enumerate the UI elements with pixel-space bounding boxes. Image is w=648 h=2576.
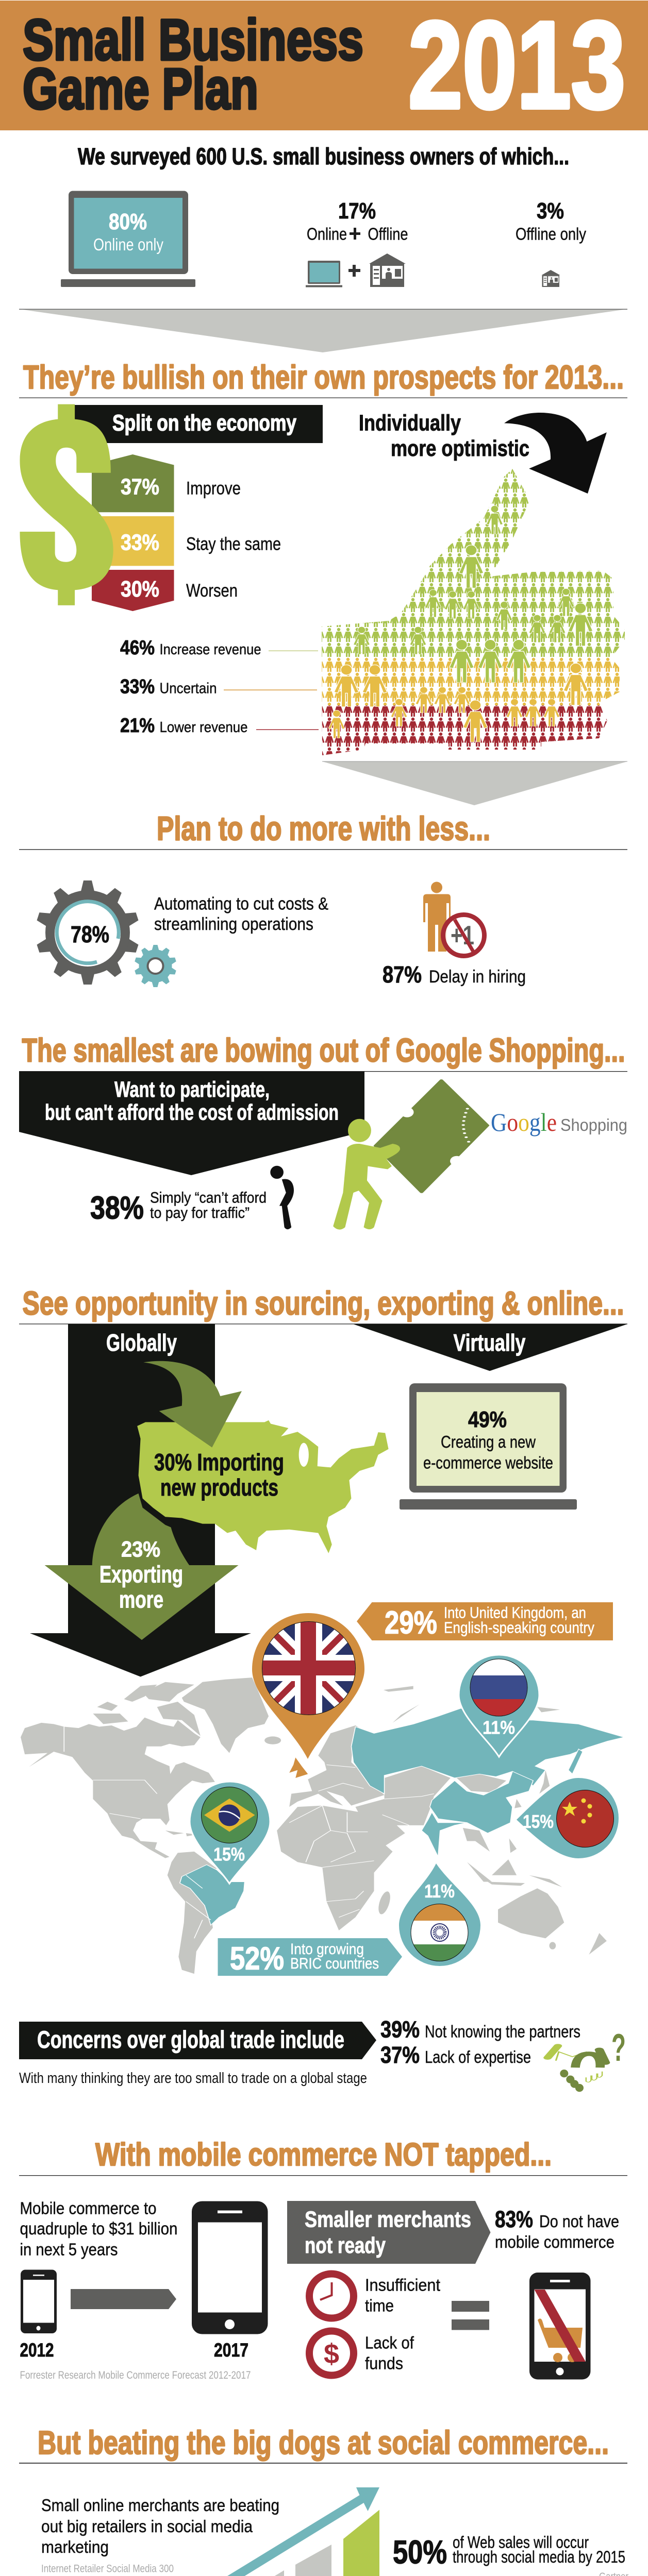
legend: lower revenue	[120, 715, 319, 737]
text: bric: Into growing	[290, 1941, 364, 1958]
stat: 83%: 83%	[495, 2206, 533, 2232]
icon: plus	[348, 265, 360, 277]
stat: importing	[154, 1449, 284, 1501]
label: online + offline: Online	[307, 225, 347, 243]
text: small merchants	[41, 2496, 279, 2556]
arrow: curved	[504, 413, 607, 494]
text: bric	[290, 1941, 379, 1972]
stat: exporting	[99, 1537, 183, 1613]
panel: google shopping	[19, 1072, 627, 1230]
panel: automating	[36, 880, 328, 987]
flag: united kingdom	[260, 1620, 358, 1718]
panel: online only	[61, 191, 195, 287]
panel: globally	[30, 1324, 389, 1676]
stat: 3%: 3%	[537, 198, 564, 224]
stat: 30% worsen: 30%	[121, 577, 159, 602]
panel: virtually	[353, 1324, 627, 1510]
icon: small store	[541, 270, 560, 287]
legend: uncertain: Uncertain	[160, 680, 217, 697]
pin: united kingdom	[252, 1613, 364, 1759]
stat: exporting: Exporting	[99, 1561, 183, 1588]
map: united states	[137, 1420, 389, 1553]
banner text: Split on the economy	[112, 410, 296, 436]
flag: china	[557, 1790, 613, 1848]
icon: dollar sign	[20, 404, 113, 605]
icon: phone with crossed cart	[529, 2273, 591, 2379]
label: online + offline	[307, 225, 408, 243]
stat: 37% improve	[121, 474, 241, 500]
black arrow	[30, 1324, 251, 1676]
text: lack of funds	[365, 2333, 414, 2373]
arrow: growth	[71, 2289, 176, 2309]
banner	[19, 2022, 376, 2059]
icon: laptop	[400, 1383, 577, 1510]
world map	[21, 1677, 624, 1974]
stat: 52%: 52%	[230, 1941, 284, 1976]
text: web sales: of Web sales will occur	[453, 2533, 589, 2551]
stat: 29%: 29%	[385, 1605, 437, 1640]
icon: clock	[309, 2274, 354, 2318]
stat: importing: new products	[160, 1474, 278, 1501]
label: 2017: 2017	[214, 2340, 248, 2361]
arrow: exporting	[45, 1494, 239, 1640]
legend: increase revenue: 46%	[120, 637, 155, 659]
banner text: but can't afford the cost of admission	[45, 1100, 339, 1125]
text: web sales	[453, 2533, 625, 2566]
stat: exporting: more	[119, 1586, 163, 1613]
label: offline only: Offline only	[516, 225, 586, 243]
text: small merchants: out big retailers in social media	[41, 2517, 253, 2536]
source: forrester: Forrester Research Mobile Commerce Forecast 2012-2017	[20, 2369, 251, 2381]
text: automating: streamlining operations	[154, 914, 313, 934]
panel: online plus offline	[306, 198, 408, 287]
text: can't afford: Simply “can’t afford	[150, 1189, 267, 1207]
title: Small Business	[23, 8, 363, 72]
text: lack of funds: funds	[365, 2353, 403, 2373]
icon: black person	[270, 1166, 294, 1229]
text: small merchants: marketing	[41, 2537, 109, 2556]
panel: mobile growth	[20, 2199, 268, 2381]
stat: 80%: 80%	[109, 209, 147, 234]
logo: google shopping: Google	[491, 1108, 557, 1137]
text: can't afford	[150, 1189, 267, 1222]
label: online only: Online only	[93, 235, 163, 254]
title	[23, 8, 363, 121]
bar stack	[92, 454, 174, 611]
icon: dollar coin	[309, 2331, 354, 2375]
icon: handshake	[547, 2046, 605, 2092]
text: quadruple: in next 5 years	[20, 2240, 118, 2259]
text: new website: e-commerce website	[423, 1453, 553, 1472]
banner	[75, 405, 323, 443]
stat: russia 11%: 11%	[483, 1717, 515, 1738]
bar chart	[28, 2487, 379, 2576]
text: automating	[154, 894, 328, 934]
banner text	[45, 1077, 339, 1125]
divider arrow	[19, 309, 627, 352]
panel: smaller merchants	[287, 2201, 619, 2379]
stat: india 11%: 11%	[424, 1880, 455, 1902]
stat: exporting: 23%	[121, 1537, 160, 1562]
text: quadruple: quadruple to $31 billion	[20, 2219, 177, 2238]
text: new website: Creating a new	[441, 1432, 536, 1451]
stat: brazil 15%: 15%	[213, 1843, 245, 1865]
stat: 50%: 50%	[393, 2534, 447, 2571]
text: insufficient time	[365, 2275, 440, 2315]
stat: 33% stay the same	[121, 530, 281, 555]
text: bric: BRIC countries	[290, 1955, 379, 1972]
icon: green person	[333, 1119, 400, 1230]
text: uk	[444, 1603, 594, 1636]
legend: uncertain: 33%	[120, 676, 155, 698]
banner text: Want to participate,	[114, 1077, 270, 1102]
stat: 37%	[380, 2042, 531, 2068]
banner text: not ready	[305, 2233, 386, 2258]
divider arrow	[322, 761, 627, 805]
panel: social media growth	[28, 2487, 628, 2576]
legend: lower revenue: Lower revenue	[160, 719, 247, 736]
stat: importing: 30% Importing	[154, 1449, 284, 1476]
panel: global trade concerns	[19, 2016, 626, 2092]
heading: mobile commerce: With mobile commerce NOT tapped...	[95, 2137, 552, 2173]
legend: uncertain	[120, 676, 317, 698]
legend: increase revenue: Increase revenue	[160, 641, 261, 658]
banner text	[305, 2207, 471, 2258]
stat: 38%: 38%	[90, 1190, 144, 1226]
banner	[287, 2201, 491, 2264]
text: automating: Automating to cut costs &	[154, 894, 328, 914]
callout: bric	[218, 1938, 402, 1976]
icon: equals	[452, 2301, 489, 2330]
heading text: more optimistic	[391, 436, 529, 461]
icon: ticket	[375, 1080, 488, 1192]
black triangle	[353, 1324, 627, 1371]
label: 2012: 2012	[20, 2340, 54, 2361]
text: new website	[423, 1432, 553, 1472]
stat: 83%: mobile commerce	[495, 2232, 614, 2251]
title: Game Plan	[23, 57, 258, 121]
text: too small: With many thinking they are too small to trade on a global stage	[19, 2070, 367, 2087]
legend: lower revenue: 21%	[120, 715, 155, 737]
text: uk: English-speaking country	[444, 1619, 594, 1636]
stat: 39%	[380, 2016, 580, 2042]
stat: china 15%: 15%	[523, 1811, 554, 1832]
stat: 39%: Not knowing the partners	[425, 2022, 580, 2041]
stat: 17%: 17%	[338, 198, 376, 224]
panel: individually more optimistic	[120, 410, 629, 757]
pin: china	[517, 1778, 619, 1858]
text: quadruple: Mobile commerce to	[20, 2199, 157, 2217]
stat: 33% stay the same: Stay the same	[186, 534, 281, 554]
text: insufficient time: Insufficient	[365, 2275, 440, 2295]
text: can't afford: to pay for traffic”	[150, 1205, 250, 1222]
text: insufficient time: time	[365, 2296, 394, 2315]
label: globally: Globally	[106, 1329, 177, 1356]
stat: 30% worsen: Worsen	[186, 581, 238, 601]
icon: no plus one	[443, 915, 485, 956]
pin: brazil	[190, 1782, 270, 1884]
icon: small laptop	[306, 261, 342, 287]
label: virtually: Virtually	[454, 1329, 526, 1356]
stat: 30% worsen	[121, 577, 238, 602]
stat: 39%: 39%	[380, 2016, 420, 2042]
stat: 37%: 37%	[380, 2042, 420, 2068]
stat: 87% delay in hiring: 87%	[383, 961, 422, 988]
panel: split on the economy	[20, 404, 323, 611]
text: small merchants: Small online merchants are beating	[41, 2496, 279, 2515]
pin: russia	[459, 1655, 539, 1757]
stat: 37% improve: 37%	[121, 474, 159, 500]
chart: thumbs-up of people	[320, 464, 629, 757]
icon: small phone	[21, 2270, 57, 2333]
stat: 78%: 78%	[71, 921, 109, 947]
callout: united kingdom	[357, 1602, 613, 1640]
arrow: importing	[143, 1361, 242, 1447]
flag: india	[410, 1903, 470, 1963]
heading text: Individually	[359, 410, 461, 436]
banner text: Smaller merchants	[305, 2207, 471, 2232]
stat: 37%: Lack of expertise	[425, 2047, 531, 2066]
stat: 87% delay in hiring	[383, 961, 526, 988]
black banner	[19, 1072, 364, 1175]
logo: google shopping: Shopping	[560, 1115, 627, 1134]
heading text	[359, 410, 529, 461]
stat: 49%: 49%	[468, 1407, 507, 1432]
legend: increase revenue	[120, 637, 318, 659]
flag: brazil	[200, 1786, 259, 1844]
icon: person	[423, 882, 451, 952]
source: internet retailer: Internet Retailer Social Media 300	[41, 2563, 174, 2575]
icon: large gear	[36, 880, 139, 985]
panel: delay in hiring	[383, 882, 526, 988]
icon: no plus one: +1	[451, 921, 474, 951]
label: online + offline: Offline	[368, 225, 408, 243]
stat: 37% improve: Improve	[186, 478, 241, 499]
text: lack of funds: Lack of	[365, 2333, 414, 2352]
icon: question mark: ?	[611, 2026, 626, 2069]
text: uk: Into United Kingdom, an	[444, 1603, 586, 1622]
stat: 33% stay the same: 33%	[121, 530, 159, 555]
stat: 87% delay in hiring: Delay in hiring	[429, 967, 526, 987]
pin: india	[399, 1863, 480, 1966]
flag: russia	[469, 1658, 529, 1718]
icon: dollar coin: $	[324, 2338, 339, 2369]
heading: plan to do more with less: Plan to do more with less...	[157, 810, 490, 847]
banner text: Concerns over global trade include	[37, 2026, 344, 2053]
stat: 83%	[495, 2206, 619, 2251]
stat: 83%: Do not have	[539, 2212, 619, 2231]
panel: offline only	[516, 198, 586, 287]
icon: large phone	[192, 2201, 268, 2334]
text: quadruple	[20, 2199, 177, 2259]
page header	[0, 0, 648, 134]
icon: large laptop	[61, 191, 195, 287]
logo: google shopping	[491, 1108, 627, 1137]
icon: small gear	[134, 945, 177, 987]
icon: store	[369, 253, 406, 287]
